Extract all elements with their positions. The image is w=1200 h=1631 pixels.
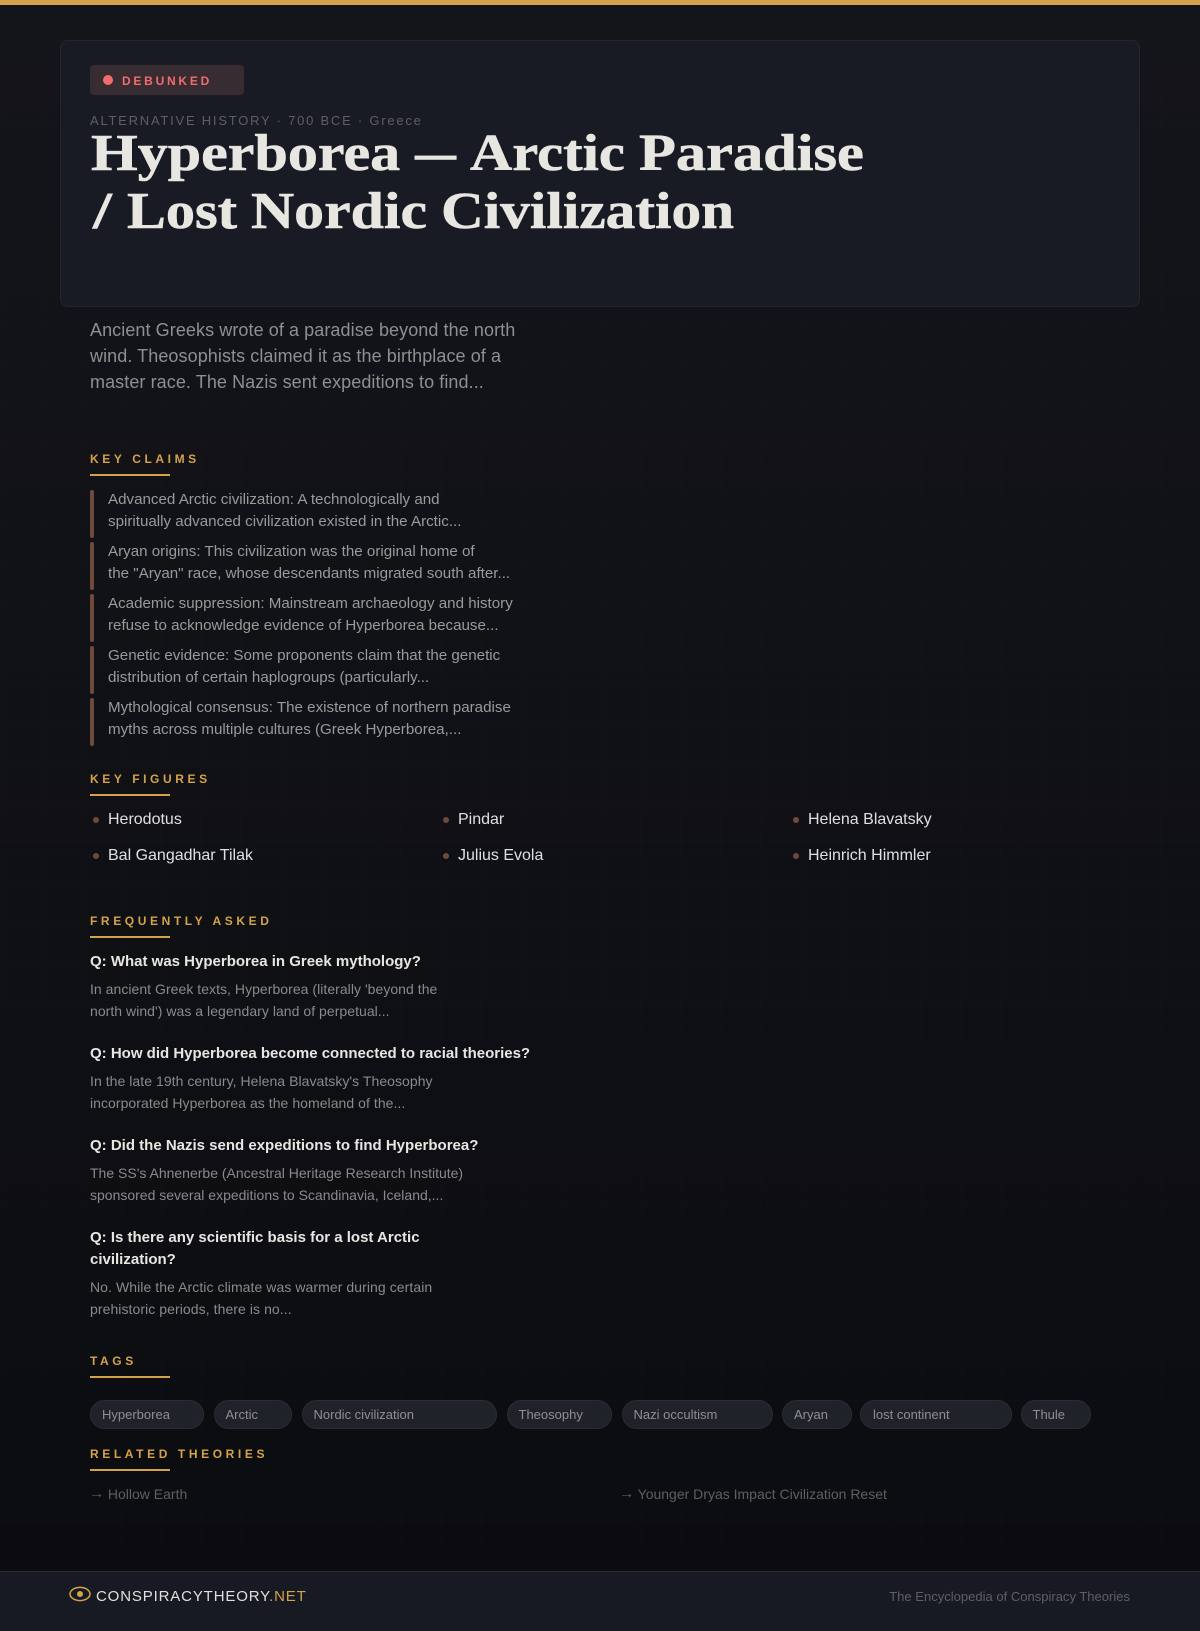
- tag: Hyperborea: [90, 1400, 204, 1429]
- title: —: [415, 125, 456, 182]
- title: Nordic: [251, 183, 427, 240]
- status badge: debunked: DEBUNKED: [122, 74, 212, 88]
- heading: frequently asked: FREQUENTLY ASKED: [90, 914, 273, 928]
- tag: Aryan: [782, 1400, 852, 1429]
- answer 2: incorporated Hyperborea as the homeland of the...: [90, 1095, 405, 1111]
- tag: Nordic civilization: [302, 1400, 497, 1429]
- related link: Hollow Earth: →: [88, 1485, 104, 1501]
- tag: Thule: Thule: [1032, 1407, 1065, 1422]
- answer 4: [90, 1279, 432, 1317]
- intro paragraph: master race. The Nazis sent expeditions to find...: [90, 372, 484, 392]
- claim 5: myths across multiple cultures (Greek Hyperborea,...: [108, 721, 461, 738]
- tag: Nazi occultism: Nazi occultism: [634, 1407, 717, 1422]
- figure: Herodotus: Herodotus: [108, 811, 182, 828]
- tag: Arctic: Arctic: [226, 1407, 258, 1422]
- status badge: debunked: [90, 65, 244, 95]
- title: Civilization: [441, 183, 734, 240]
- claim 3: [90, 594, 513, 642]
- heading: key figures: KEY FIGURES: [90, 772, 211, 786]
- intro paragraph: wind. Theosophists claimed it as the birthplace of a: [90, 346, 501, 366]
- heading: related theories: RELATED THEORIES: [90, 1447, 268, 1461]
- question 1: Q: What was Hyperborea in Greek mythology?: [90, 953, 421, 970]
- question 2: Q: How did Hyperborea become connected to racial theories?: [90, 1045, 530, 1062]
- claim 3: Academic suppression: Mainstream archaeology and history: [108, 595, 513, 612]
- title: Arctic: [470, 125, 624, 182]
- tag: Theosophy: [506, 1400, 612, 1429]
- title: /: [93, 183, 112, 240]
- claim 3: refuse to acknowledge evidence of Hyperborea because...: [108, 617, 499, 634]
- claim 4: Genetic evidence: Some proponents claim that the genetic: [108, 647, 500, 664]
- tag: Nazi occultism: [622, 1400, 773, 1429]
- brand wordmark: CONSPIRACYTHEORY.NET: [96, 1588, 307, 1605]
- claim 5: [90, 698, 511, 746]
- related link: Younger Dryas: Younger Dryas Impact Civilization Reset: [638, 1486, 887, 1502]
- claim 2: the "Aryan" race, whose descendants migrated south after...: [108, 565, 510, 582]
- footer bar: [0, 1571, 1200, 1631]
- figure: Pindar: Pindar: [458, 811, 504, 828]
- answer 1: In ancient Greek texts, Hyperborea (literally 'beyond the: [90, 981, 437, 997]
- claim 5: Mythological consensus: The existence of northern paradise: [108, 699, 511, 716]
- related link: Younger Dryas: →: [618, 1485, 634, 1501]
- section: frequently asked: [90, 914, 530, 1317]
- tag: Nordic civilization: Nordic civilization: [314, 1407, 414, 1422]
- title: Hyperborea: [90, 125, 400, 182]
- section: key figures: [90, 772, 932, 864]
- answer 2: [90, 1073, 433, 1111]
- claim 1: [90, 490, 461, 538]
- intro paragraph: Ancient Greeks wrote of a paradise beyond the north: [90, 320, 515, 340]
- tag: Theosophy: Theosophy: [518, 1407, 583, 1422]
- answer 3: [90, 1165, 463, 1203]
- question 4: Q: Is there any scientific basis for a lost Arctic: [90, 1229, 420, 1246]
- header card: [60, 40, 1140, 307]
- question 3: Q: Did the Nazis send expeditions to find Hyperborea?: [90, 1137, 478, 1154]
- answer 2: In the late 19th century, Helena Blavatsky's Theosophy: [90, 1073, 433, 1089]
- heading: tags: TAGS: [90, 1354, 137, 1368]
- claim 1: spiritually advanced civilization existed in the Arctic...: [108, 513, 461, 530]
- answer 1: [90, 981, 437, 1019]
- related link: Hollow Earth: Hollow Earth: [108, 1486, 187, 1502]
- answer 3: The SS's Ahnenerbe (Ancestral Heritage Research Institute): [90, 1165, 463, 1181]
- answer 1: north wind') was a legendary land of perpetual...: [90, 1003, 390, 1019]
- answer 4: No. While the Arctic climate was warmer during certain: [90, 1279, 432, 1295]
- claim 1: Advanced Arctic civilization: A technologically and: [108, 491, 440, 508]
- claim 4: [90, 646, 500, 694]
- title: [90, 125, 864, 240]
- heading: key claims: KEY CLAIMS: [90, 452, 200, 466]
- footer tagline: The Encyclopedia of Conspiracy Theories: [889, 1589, 1130, 1604]
- category meta line: ALTERNATIVE HISTORY · 700 BCE · Greece: [90, 113, 423, 128]
- question 4: civilization?: [90, 1251, 176, 1268]
- figure: Bal Gangadhar Tilak: Bal Gangadhar Tilak: [108, 847, 253, 864]
- figure: Heinrich Himmler: Heinrich Himmler: [808, 847, 931, 864]
- intro paragraph: [90, 320, 515, 392]
- tag: Hyperborea: Hyperborea: [102, 1407, 170, 1422]
- title: Lost: [127, 183, 237, 240]
- title: Paradise: [639, 125, 864, 182]
- tag: lost continent: lost continent: [873, 1407, 950, 1422]
- tag: Arctic: [214, 1400, 292, 1429]
- claim 4: distribution of certain haplogroups (particularly...: [108, 669, 429, 686]
- claim 2: Aryan origins: This civilization was the original home of: [108, 543, 475, 560]
- tag: Thule: [1020, 1400, 1091, 1429]
- icon: eye logo: [69, 1586, 91, 1602]
- figure: Julius Evola: Julius Evola: [458, 847, 543, 864]
- answer 4: prehistoric periods, there is no...: [90, 1301, 292, 1317]
- answer 3: sponsored several expeditions to Scandinavia, Iceland,...: [90, 1187, 443, 1203]
- question 4: [90, 1229, 420, 1268]
- tag: Aryan: Aryan: [794, 1407, 828, 1422]
- claim 2: [90, 542, 510, 590]
- section: key claims: [90, 452, 513, 746]
- figure: Helena Blavatsky: Helena Blavatsky: [808, 811, 932, 828]
- tag: lost continent: [860, 1400, 1012, 1429]
